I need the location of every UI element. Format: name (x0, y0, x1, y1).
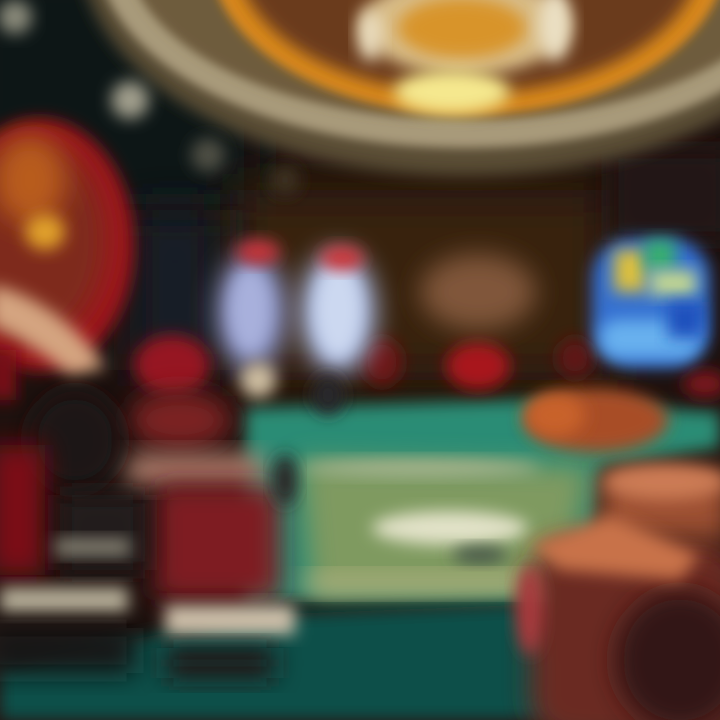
wall ornament (420, 254, 536, 330)
chips: orange stacks right (516, 388, 720, 720)
figure pair: blue-white mascots (216, 240, 376, 415)
ceiling: ornate dome (80, 0, 720, 176)
ceiling lights (0, 0, 300, 195)
table: green felt (0, 400, 720, 720)
chips: red and white stacks left (0, 335, 297, 678)
wheel: red circular emblem left (0, 119, 134, 376)
screen: colourful display (592, 238, 710, 368)
red seats along the back wall (362, 338, 720, 398)
